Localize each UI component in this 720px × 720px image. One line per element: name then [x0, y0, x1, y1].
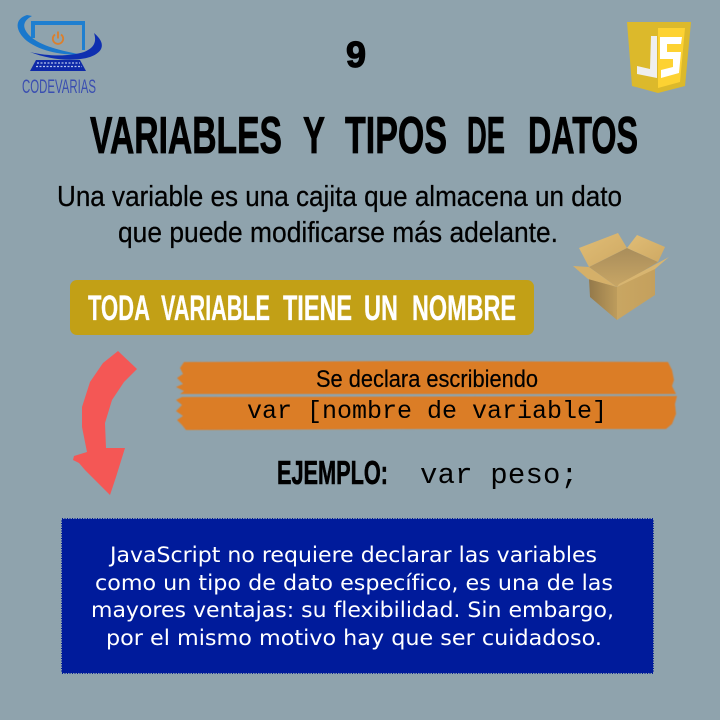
declaration syntax: var [nombre de variable]: [247, 397, 607, 426]
icon: keyboard: [30, 60, 86, 71]
banner: every variable has a name: [70, 280, 534, 335]
S letterform: [660, 37, 682, 78]
brush panel: declaration: [176, 361, 677, 430]
icon: monitor: [18, 15, 102, 60]
note text: mayores ventajas: su flexibilidad. Sin embargo,: [91, 598, 614, 623]
declaration label: Se declara escribiendo: [316, 366, 538, 393]
title: Y: [303, 107, 325, 165]
J letterform: [637, 36, 657, 78]
banner text: NOMBRE: [412, 289, 516, 328]
panel: flexibility note: [62, 519, 653, 673]
icon: JavaScript shield: [627, 22, 691, 93]
note text: como un tipo de dato específico, es una de las: [95, 571, 613, 596]
note text: por el mismo motivo hay que ser cuidadoso.: [106, 626, 602, 651]
example code: var peso;: [420, 459, 578, 492]
title: DATOS: [528, 107, 638, 165]
intro text: [57, 181, 622, 249]
banner text: TIENE: [283, 289, 352, 328]
banner text: VARIABLE: [161, 289, 270, 328]
title: DE: [467, 107, 505, 165]
intro text: Una variable es una cajita que almacena un dato: [57, 181, 622, 213]
icon: power button: [53, 32, 63, 44]
icon: cardboard box: [573, 233, 669, 320]
banner text: UN: [364, 289, 398, 328]
title: VARIABLES: [90, 107, 282, 165]
lesson number: 9: [346, 34, 366, 75]
brush strokes: [176, 361, 677, 430]
note text: [91, 543, 614, 651]
note text: JavaScript no requiere declarar las variables: [108, 543, 597, 568]
banner text: [88, 289, 516, 328]
example label: EJEMPLO:: [277, 454, 388, 491]
title: [90, 107, 638, 165]
title: TIPOS: [345, 107, 447, 165]
logo: Codevarias: [18, 15, 102, 98]
arrow: curved red arrow pointing down: [73, 351, 137, 495]
banner text: TODA: [88, 289, 150, 328]
intro text: que puede modificarse más adelante.: [118, 217, 558, 249]
logo wordmark: CODEVARIAS: [22, 77, 96, 98]
